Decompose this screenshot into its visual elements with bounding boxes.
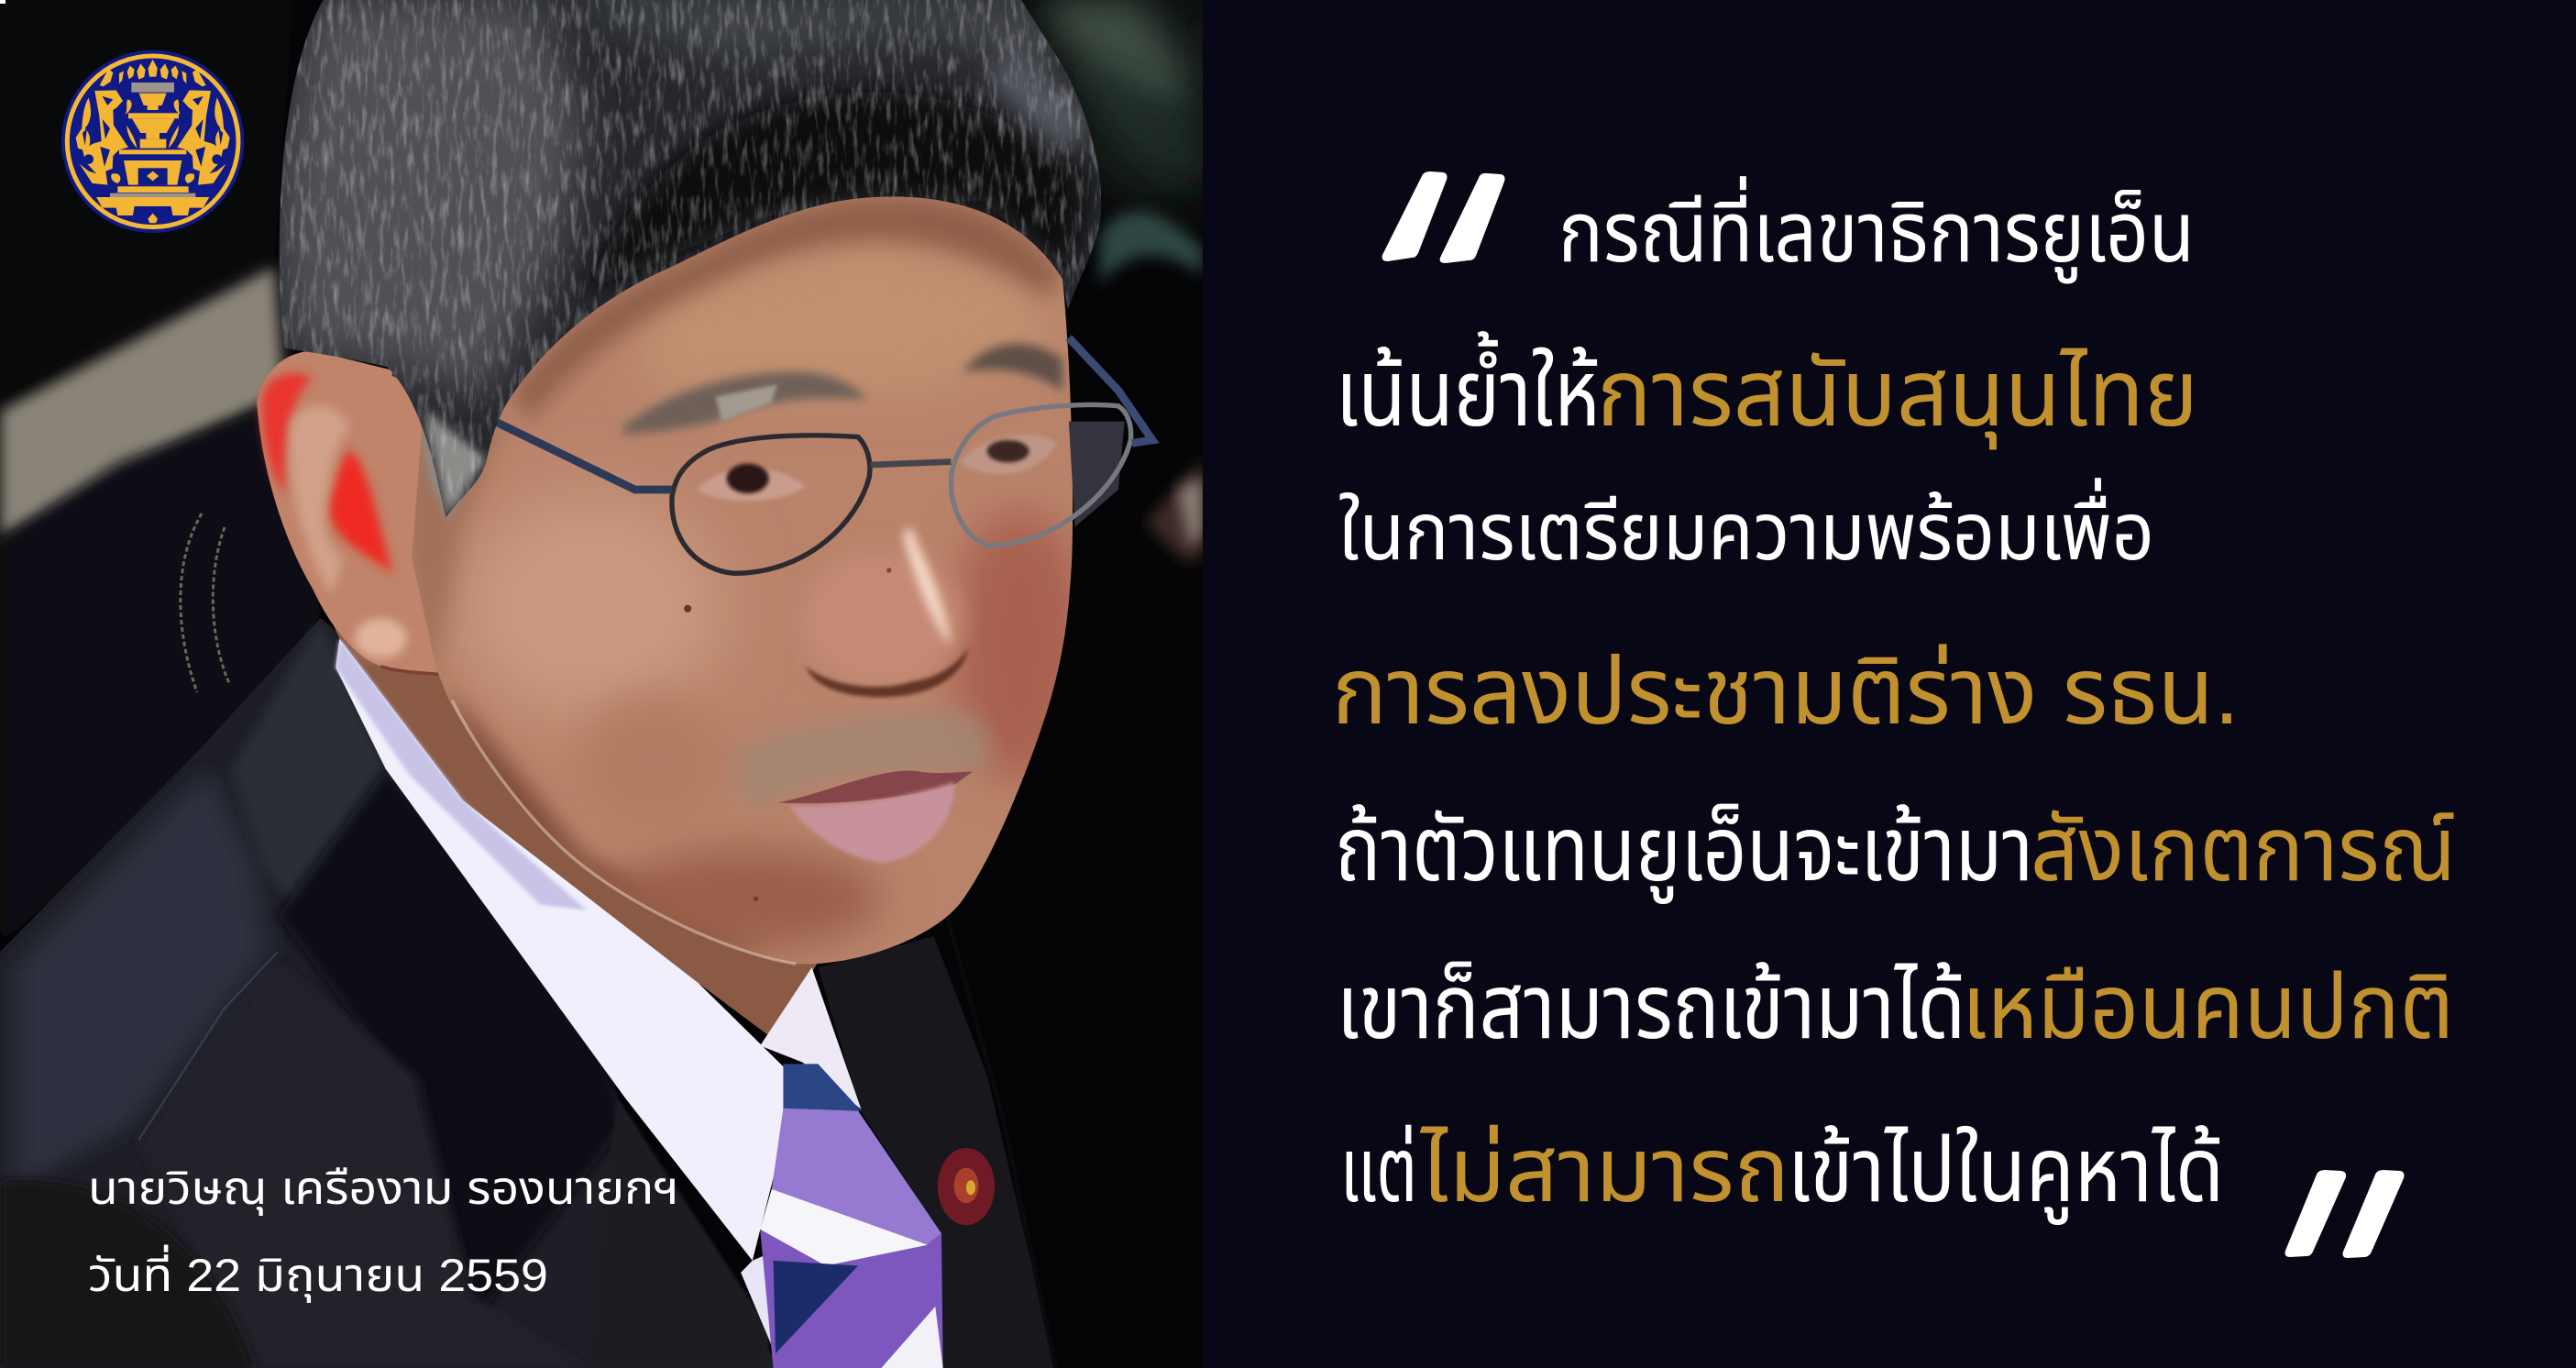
quote line 2: การสนับสนุนไทย <box>1597 341 2198 450</box>
glasses <box>393 337 1152 573</box>
caption: name and date: วันที่ 22 มิถุนายน 2559 <box>88 1244 548 1303</box>
quote line 7: ไม่สามารถ <box>1419 1120 1789 1220</box>
lapel pin <box>938 1148 995 1225</box>
quote line 4: การลงประชามติร่าง รธน. <box>1332 639 2240 744</box>
quote line 6: เหมือนคนปกติ <box>1962 956 2454 1057</box>
quote line 2: เน้นย้ำให้ <box>1336 331 1600 446</box>
striped tie <box>760 1064 943 1368</box>
quote line 6: เขาก็สามารถเข้ามาได้ <box>1337 956 1965 1057</box>
closing quotation mark <box>2285 1170 2404 1258</box>
quote line 2 <box>1336 331 2198 450</box>
neck <box>334 625 818 1034</box>
quote line 7 <box>1340 1120 2224 1225</box>
mark: top-left corner fleck <box>0 0 6 4</box>
quote line 1: กรณีที่เลขาธิการยูเอ็น <box>1558 176 2195 283</box>
logo: Office of the Prime Minister seal <box>61 50 244 233</box>
hair <box>270 0 1112 533</box>
car interior backdrop <box>0 0 1203 1368</box>
quote line 7: แต่ <box>1340 1120 1417 1220</box>
face <box>406 196 1087 964</box>
photo: portrait of Wissanu Krea-ngam <box>0 0 1203 1368</box>
quote line 6 <box>1337 956 2454 1057</box>
quote line 5: ถ้าตัวแทนยูเอ็นจะเข้ามา <box>1335 799 2033 904</box>
opening quotation mark <box>1382 171 1505 263</box>
eyebrows <box>622 344 1062 434</box>
caption: name and date <box>88 1163 679 1303</box>
urn and pedestal <box>96 83 209 215</box>
quote line 7: เข้าไปในคูหาได้ <box>1788 1120 2224 1225</box>
quote line 5 <box>1335 799 2456 904</box>
caption: name and date: นายวิษณุ เครืองาม รองนายกฯ <box>88 1163 679 1216</box>
shirt collar <box>336 639 861 1346</box>
quote line 3: ในการเตรียมความพร้อมเพื่อ <box>1338 478 2154 577</box>
quote line 5: สังเกตการณ์ <box>2031 799 2456 899</box>
suit jacket <box>0 618 1056 1368</box>
ear <box>257 351 449 674</box>
